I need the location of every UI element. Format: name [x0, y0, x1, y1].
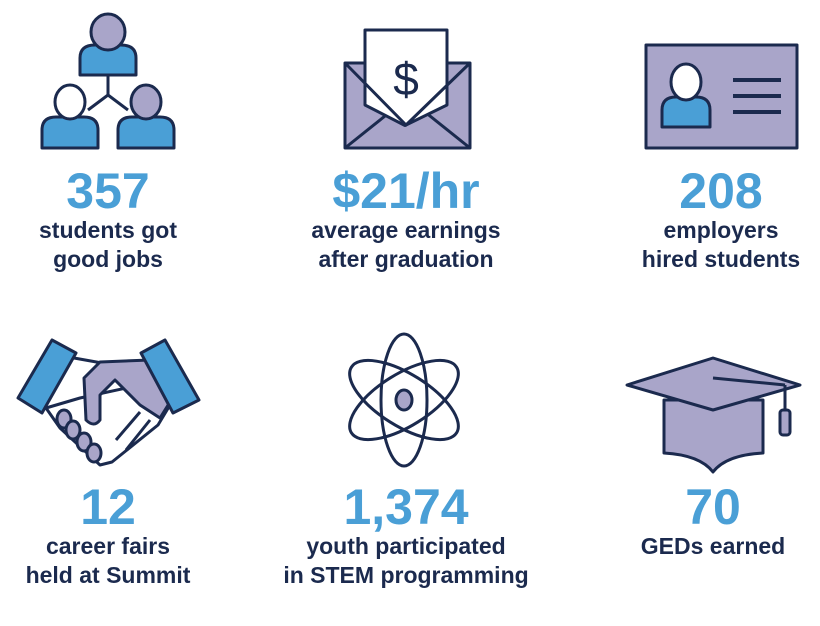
icon: people network [42, 14, 174, 148]
icon: atom [338, 334, 470, 466]
stat: 208: hired students [642, 246, 800, 272]
stat: 357: students got [39, 217, 177, 243]
icon: ID card [646, 45, 797, 148]
stat: $21/hr: after graduation [318, 246, 494, 272]
stat: 70 [641, 479, 785, 559]
stat: 12: held at Summit [26, 562, 190, 588]
stat: 357: 357 [66, 163, 150, 219]
stat: $21/hr [311, 163, 501, 272]
stat: 357 [39, 163, 177, 272]
stat: 1,374: in STEM programming [283, 562, 529, 588]
stat: 208: 208 [679, 163, 763, 219]
stat: 357: good jobs [53, 246, 163, 272]
stat: 70: 70 [685, 479, 741, 535]
stat: $21/hr: average earnings [311, 217, 501, 243]
stat: 12: career fairs [46, 533, 170, 559]
icon: envelope with dollar [345, 30, 470, 148]
icon: handshake [18, 340, 199, 465]
icon: graduation cap [627, 358, 800, 472]
icon: envelope with dollar: $ [393, 53, 419, 105]
stat: 208: employers [663, 217, 779, 243]
stat: 208 [642, 163, 800, 272]
stat: 1,374 [283, 479, 529, 588]
stat: 12: 12 [80, 479, 136, 535]
stat: 1,374: youth participated [306, 533, 506, 559]
stat: $21/hr: $21/hr [332, 163, 480, 219]
stat: 12 [26, 479, 190, 588]
stat: 1,374: 1,374 [343, 479, 469, 535]
stat: 70: GEDs earned [641, 533, 785, 559]
